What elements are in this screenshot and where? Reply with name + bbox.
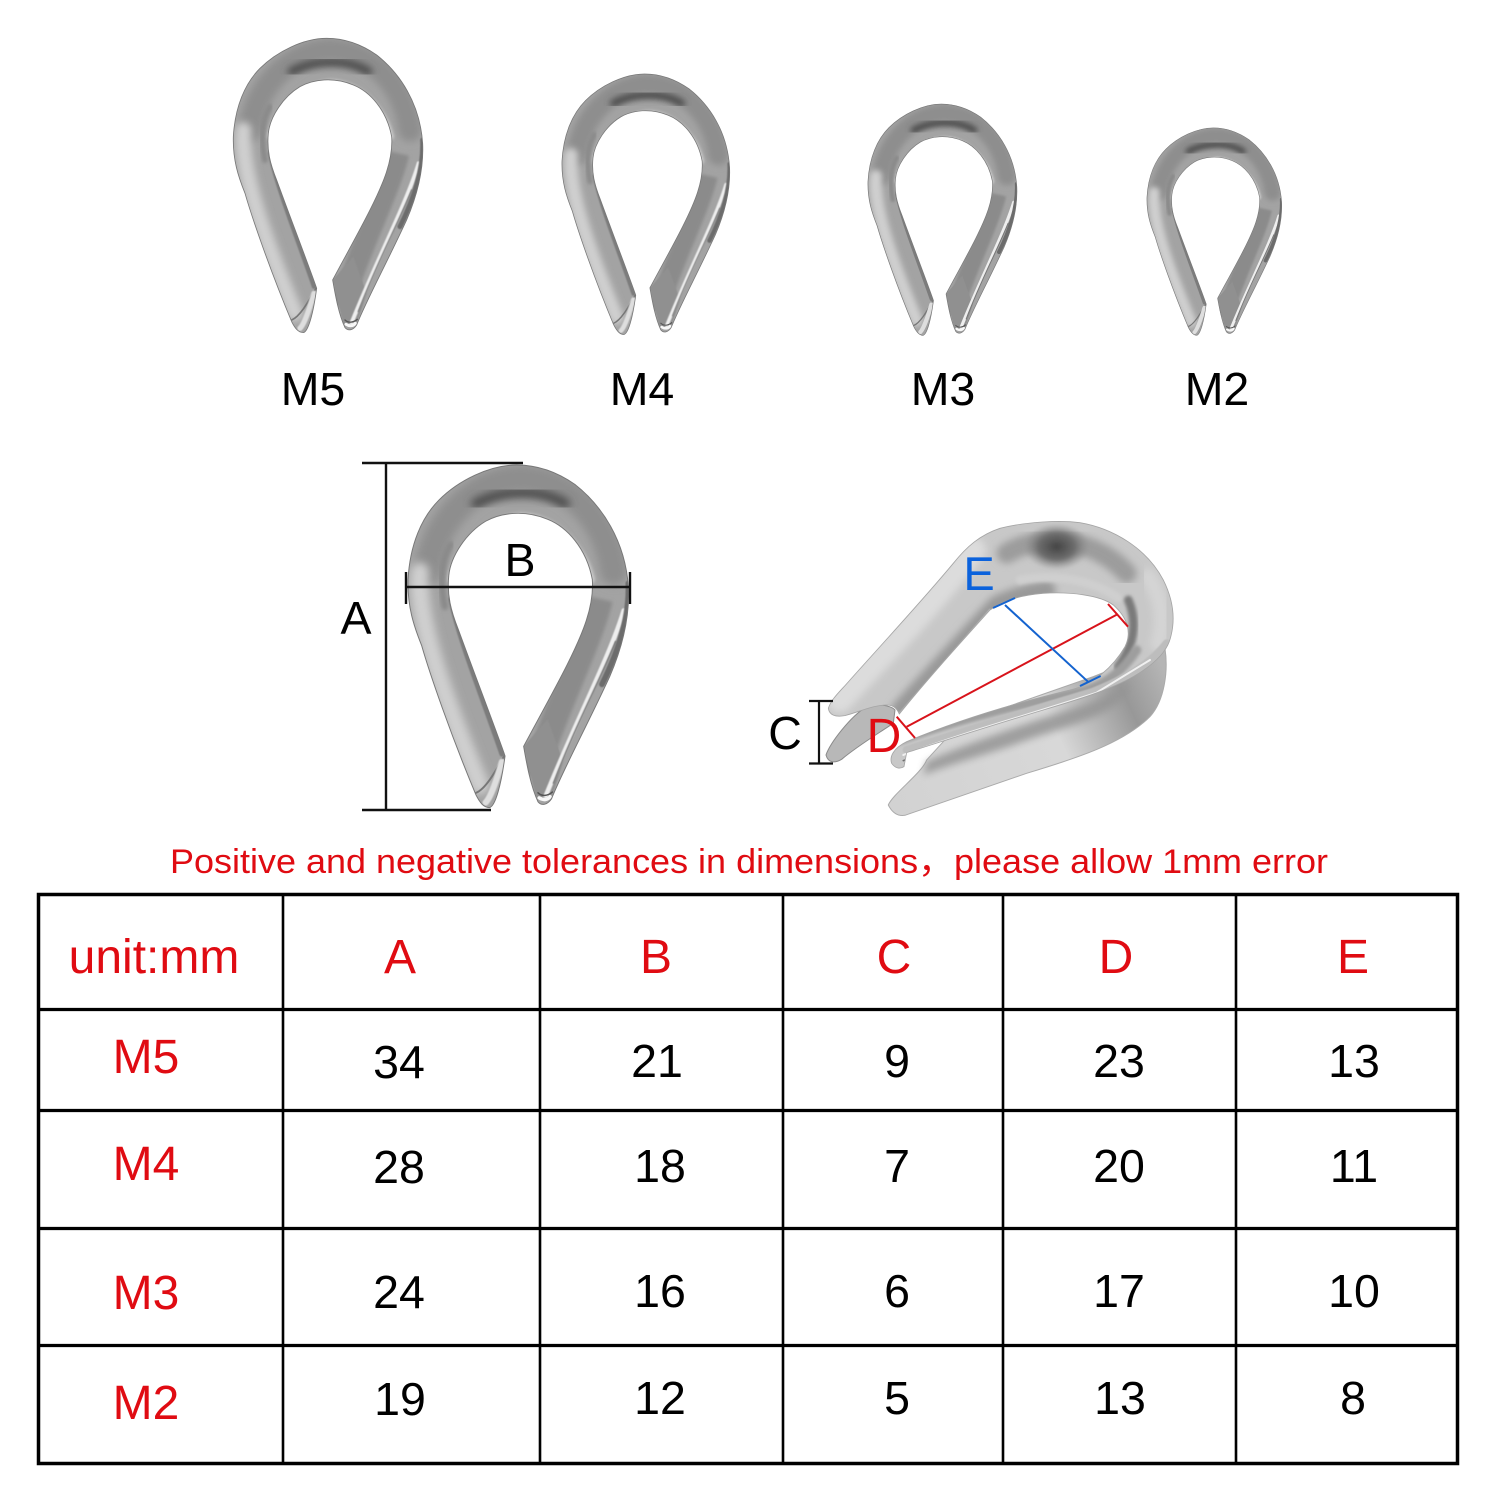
row M5: 21 [631, 1035, 683, 1087]
dimension D [867, 604, 1128, 763]
row M2: 13 [1094, 1372, 1146, 1424]
dimension E: E [963, 547, 995, 600]
size thimbles row [230, 35, 1284, 337]
row M4: M4 [113, 1138, 179, 1191]
row M5 [113, 1031, 1380, 1088]
table header row: B [640, 931, 672, 984]
row M4: 20 [1093, 1140, 1145, 1192]
size labels [281, 363, 1249, 415]
row M3 [113, 1265, 1380, 1320]
angled thimble body [823, 517, 1177, 816]
dimension C [768, 701, 833, 764]
dimension D: D [867, 710, 901, 763]
size labels: M3 [911, 363, 975, 415]
row M3: 6 [884, 1265, 910, 1317]
row M3: 24 [373, 1266, 425, 1318]
row M4: 18 [634, 1140, 686, 1192]
row M2 [113, 1372, 1366, 1430]
dimensions table [38, 894, 1458, 1464]
size labels: M5 [281, 363, 345, 415]
tolerance note: Positive and negative tolerances in dimensions，please allow 1mm error [170, 843, 1328, 881]
row M2: 19 [374, 1373, 426, 1425]
row M5: 9 [884, 1035, 910, 1087]
row M5: 23 [1093, 1035, 1145, 1087]
front view diagram with A and B dimensions: B [504, 534, 536, 586]
row M3: 10 [1328, 1265, 1380, 1317]
table grid [38, 894, 1458, 1464]
thimble M3 [865, 101, 1020, 337]
size labels: M2 [1185, 363, 1249, 415]
angled view diagram with C, D and E dimensions [768, 517, 1177, 816]
table header row: A [384, 931, 416, 984]
thimble M5 [230, 35, 427, 335]
row M4: 7 [884, 1140, 910, 1192]
front view diagram with A and B dimensions: A [340, 592, 372, 644]
row M2: M2 [113, 1377, 179, 1430]
dimension E [963, 547, 1101, 686]
table header row: E [1337, 931, 1369, 984]
row M2: 12 [634, 1372, 686, 1424]
row M2: 5 [884, 1372, 910, 1424]
dimension C: C [768, 707, 802, 759]
size labels: M4 [610, 363, 674, 415]
row M5: M5 [113, 1031, 179, 1084]
front view diagram with A and B dimensions [340, 461, 633, 810]
row M4 [113, 1138, 1378, 1193]
table header row: C [877, 931, 911, 984]
row M3: 17 [1093, 1265, 1145, 1317]
row M2: 8 [1340, 1372, 1366, 1424]
row M5: 34 [373, 1036, 425, 1088]
row M3: M3 [113, 1267, 179, 1320]
table header row: unit:mm [69, 931, 239, 984]
thimble M4 [559, 71, 733, 337]
table header row: D [1099, 931, 1133, 984]
table header row [69, 931, 1369, 984]
row M3: 16 [634, 1265, 686, 1317]
row M4: 11 [1330, 1140, 1378, 1192]
row M4: 28 [373, 1141, 425, 1193]
thimble M2 [1145, 126, 1284, 337]
row M5: 13 [1328, 1035, 1380, 1087]
